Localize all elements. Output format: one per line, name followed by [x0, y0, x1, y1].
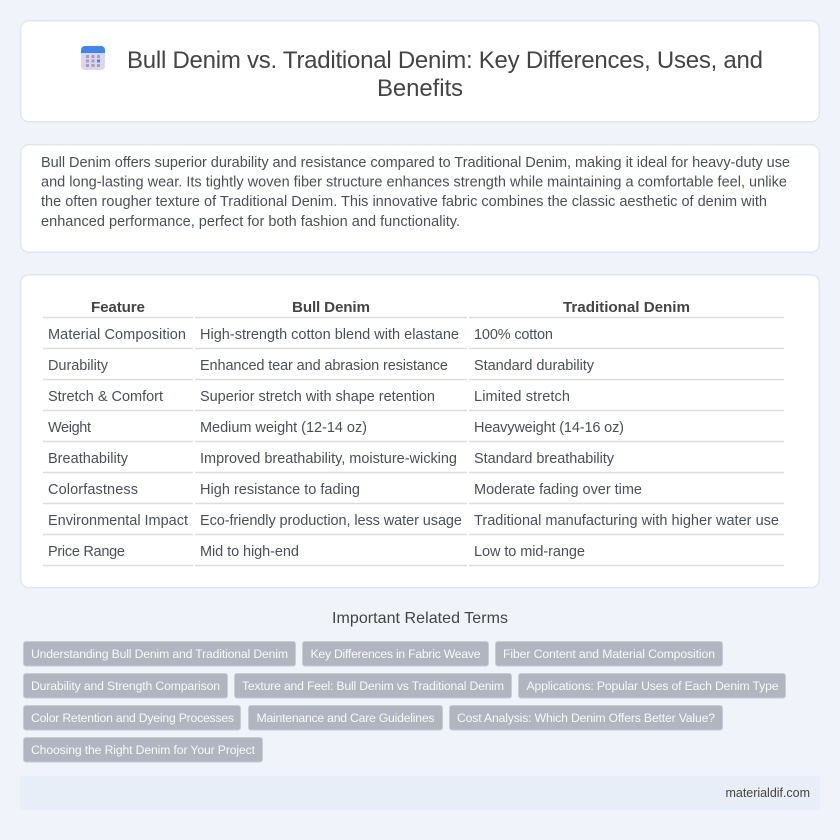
- text block: introduction: [41, 155, 790, 230]
- tag: [248, 706, 442, 730]
- title: [127, 47, 763, 102]
- table row: price range: Low to mid-range: [474, 544, 585, 560]
- table row: breathability: Breathability: [48, 451, 129, 467]
- tag: [24, 706, 240, 730]
- footer source text: materialdif.com: [726, 786, 810, 800]
- table row: price range: [43, 544, 784, 566]
- table row: environmental impact: [43, 513, 784, 534]
- table row: weight: [43, 420, 784, 442]
- tag: [24, 674, 228, 698]
- panel: header: [21, 21, 819, 122]
- table header row: Traditional Denim: [563, 299, 690, 316]
- table row: price range: Price Range: [48, 544, 125, 560]
- table row: stretch and comfort: Superior stretch with shape retention: [200, 389, 435, 405]
- tag: [496, 642, 722, 666]
- tag: Key Differences in Fabric Weave: [310, 647, 481, 661]
- table row: material composition: High-strength cotton blend with elastane: [200, 327, 459, 343]
- table row: environmental impact: Eco-friendly production, less water usage: [200, 513, 462, 529]
- table row: colorfastness: Colorfastness: [48, 482, 138, 498]
- panel: related term tags: [24, 642, 786, 762]
- table row: durability: [43, 358, 784, 380]
- table row: weight: Medium weight (12-14 oz): [200, 420, 367, 436]
- table row: material composition: 100% cotton: [474, 327, 553, 343]
- table row: environmental impact: Traditional manufacturing with higher water use: [474, 513, 779, 529]
- text block: introduction: Bull Denim offers superior durability and resistance compared to Traditional Denim, making it ideal for heavy-duty use: [41, 155, 790, 171]
- tag: Maintenance and Care Guidelines: [256, 711, 434, 725]
- table row: durability: Standard durability: [474, 358, 595, 374]
- table row: colorfastness: High resistance to fading: [200, 482, 360, 498]
- table row: stretch and comfort: Limited stretch: [474, 389, 570, 405]
- tag: Understanding Bull Denim and Traditional Denim: [31, 647, 288, 661]
- table header row: [43, 299, 784, 318]
- table row: weight: Heavyweight (14-16 oz): [474, 420, 624, 436]
- text block: introduction: enhanced performance, perfect for both fashion and functionality.: [41, 214, 460, 230]
- table row: stretch and comfort: Stretch & Comfort: [48, 389, 163, 405]
- tag: [518, 674, 786, 698]
- text block: introduction: the often rougher texture of Traditional Denim. This innovative fabric combines the classic aesthetic of denim with: [41, 194, 767, 210]
- tag: Texture and Feel: Bull Denim vs Traditional Denim: [242, 679, 504, 693]
- tag: Choosing the Right Denim for Your Project: [31, 743, 256, 757]
- table row: colorfastness: Moderate fading over time: [474, 482, 642, 498]
- tag: Color Retention and Dyeing Processes: [31, 711, 234, 725]
- table header row: Feature: [91, 299, 145, 316]
- heading: important related terms: Important Related Terms: [332, 610, 508, 627]
- icon: calendar: [81, 46, 105, 70]
- tag: [24, 642, 296, 666]
- table row: material composition: Material Composition: [48, 327, 186, 343]
- footer: [20, 776, 820, 810]
- tag: Applications: Popular Uses of Each Denim Type: [526, 679, 779, 693]
- table row: breathability: Improved breathability, moisture-wicking: [200, 451, 457, 467]
- tag: Durability and Strength Comparison: [31, 679, 220, 693]
- table row: weight: Weight: [48, 420, 91, 436]
- table row: durability: Enhanced tear and abrasion resistance: [200, 358, 448, 374]
- panel: introduction text: [21, 145, 819, 252]
- title: Benefits: [377, 75, 463, 102]
- tag: [24, 738, 262, 762]
- title: Bull Denim vs. Traditional Denim: Key Differences, Uses, and: [127, 47, 763, 74]
- table row: price range: Mid to high-end: [200, 544, 299, 560]
- table row: colorfastness: [43, 482, 784, 504]
- tag: [234, 674, 512, 698]
- table row: breathability: Standard breathability: [474, 451, 615, 467]
- table row: material composition: [43, 327, 784, 348]
- table row: breathability: [43, 451, 784, 472]
- table row: environmental impact: Environmental Impact: [48, 513, 188, 529]
- tag: [302, 642, 488, 666]
- panel: comparison table: [21, 275, 819, 588]
- text block: introduction: and long-lasting wear. Its tightly woven fiber structure enhances strength while maintaining a comfortable feel, unlike: [41, 174, 787, 190]
- tag: [450, 706, 722, 730]
- tag: Cost Analysis: Which Denim Offers Better Value?: [457, 711, 715, 725]
- table row: durability: Durability: [48, 358, 109, 374]
- table header row: Bull Denim: [292, 299, 370, 316]
- tag: Fiber Content and Material Composition: [503, 647, 715, 661]
- table row: stretch and comfort: [43, 389, 784, 410]
